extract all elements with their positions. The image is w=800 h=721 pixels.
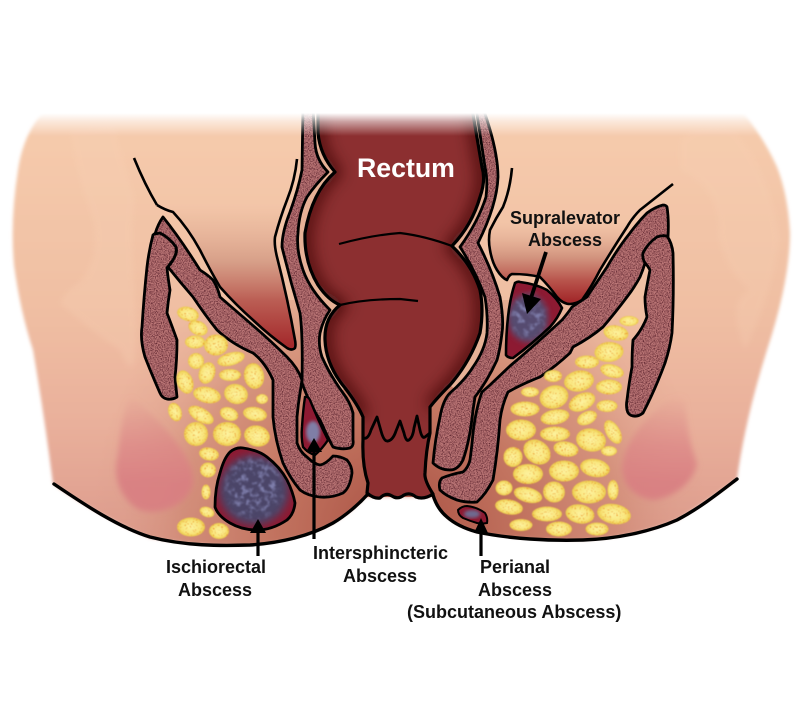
rectal fold upper: [339, 233, 452, 246]
left levator and external sphincter muscle: [155, 217, 352, 497]
intersphincteric abscess: [302, 397, 328, 455]
left internal sphincter muscle: [282, 108, 353, 449]
label: Intersphincteric Abscess: Abscess: [343, 566, 417, 586]
right pelvic wedge: [489, 168, 673, 304]
lining around rectum: [305, 120, 484, 388]
body silhouette: [13, 112, 790, 545]
label: Perianal Abscess (Subcutaneous Abscess): Perianal: [480, 557, 550, 577]
label: Supralevator Abscess: Abscess: [528, 230, 602, 250]
right internal sphincter muscle: [433, 108, 503, 470]
top fade to white: [0, 100, 800, 136]
thigh contour highlight left: [60, 125, 136, 367]
label: Supralevator Abscess: Supralevator: [510, 208, 620, 228]
buttock crease right: [622, 390, 697, 500]
arrow: supralevator: [522, 252, 546, 314]
label: Rectum: Rectum: [357, 153, 455, 183]
label: Supralevator Abscess: [510, 208, 620, 250]
ischiorectal abscess: [215, 448, 295, 530]
fat globules: [166, 304, 638, 539]
label: Intersphincteric Abscess: [313, 543, 448, 586]
right ischial muscle: [626, 236, 673, 416]
arrow: ischiorectal: [250, 519, 266, 556]
label: Perianal Abscess (Subcutaneous Abscess): Abscess: [478, 580, 552, 600]
perianal abscess: [458, 506, 487, 524]
supralevator abscess: [506, 282, 562, 358]
label: Ischiorectal Abscess: Ischiorectal: [166, 557, 266, 577]
rectum: [305, 108, 484, 498]
rectum outline: [305, 108, 484, 498]
right levator and external sphincter muscle: [439, 205, 668, 502]
thigh contour highlight right: [680, 127, 780, 350]
label: Ischiorectal Abscess: Abscess: [178, 580, 252, 600]
dentate line zigzag: [363, 416, 430, 441]
label: Ischiorectal Abscess: [166, 557, 266, 600]
label: Intersphincteric Abscess: Intersphincteric: [313, 543, 448, 563]
left ischial muscle: [141, 233, 177, 399]
label: Perianal Abscess (Subcutaneous Abscess): (Subcutaneous Abscess): [407, 602, 621, 622]
rectum inner shadow: [305, 108, 484, 417]
buttock crease left: [116, 395, 193, 512]
arrow: perianal: [474, 518, 488, 556]
rectal fold lower: [340, 299, 418, 305]
label: Perianal Abscess (Subcutaneous Abscess): [407, 557, 621, 622]
arrow: intersphincteric: [306, 438, 322, 539]
skin line right: [433, 479, 737, 540]
left pelvic wedge: [134, 158, 297, 350]
skin line left: [54, 484, 367, 545]
